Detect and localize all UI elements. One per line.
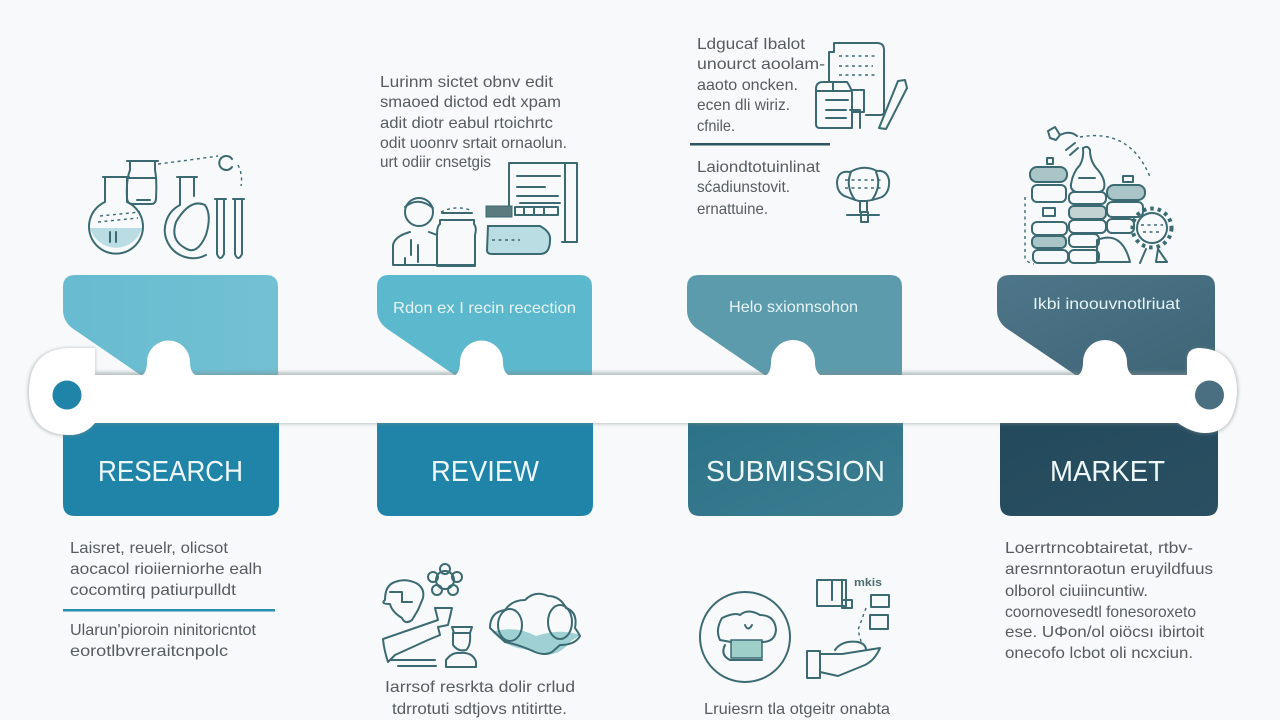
text block: submission top: Ldgucaf Ibalot <box>697 36 806 53</box>
panel: research label card <box>63 422 279 516</box>
text block: submission top <box>697 36 825 135</box>
panel: submission card top <box>687 275 902 376</box>
text block: research lower second: Ularun'pioroin ninitoricntot <box>70 622 257 639</box>
icon: document with clipboard and pencil <box>816 43 907 129</box>
text block: submission top: aaoto oncken. <box>697 77 798 94</box>
text block: market lower: Loerrtrncobtairetat, rtbv- <box>1005 540 1193 557</box>
text block: research lower second <box>70 622 257 660</box>
panel: market label card <box>1000 422 1218 516</box>
panel: review card top <box>377 275 592 376</box>
text block: submission lower: Lruiesrn tla otgeitr onabta <box>704 701 890 718</box>
text block: market lower: coornovesedtl fonesoroxeto <box>1005 604 1196 621</box>
text block: market lower <box>1005 540 1213 662</box>
end marker <box>1195 380 1224 410</box>
text block: market lower: onecofo lcbot oli ncxciun. <box>1005 645 1193 662</box>
divider: research <box>63 609 275 612</box>
text block: review top: urt odiir cnsetgis <box>380 154 491 171</box>
text block: submission second: Laiondtotuinlinat <box>697 159 821 176</box>
text block: market lower: ese. UΦon/ol oiöcsı ibirtoit <box>1005 624 1205 641</box>
text block: review top <box>380 74 567 171</box>
text block: submission top: cfnile. <box>697 118 735 135</box>
text block: review top: smaoed dictod edt xpam <box>380 94 561 111</box>
text block: review top: adit diotr eabul rtoichrtc <box>380 115 553 132</box>
text block: submission top: unourct aoolam- <box>697 56 825 73</box>
text block: review top: odit uoonrv srtait ornaolun. <box>380 135 567 152</box>
label: icon text: mkis <box>854 577 882 589</box>
text block: research lower <box>70 540 262 599</box>
heading: research: RESEARCH <box>98 456 243 488</box>
text block: submission second: ernattuine. <box>697 201 768 218</box>
text block: research lower: Laisret, reuelr, olicsot <box>70 540 229 557</box>
panel: review label card <box>377 422 593 516</box>
heading: market: MARKET <box>1050 456 1165 488</box>
text block: market lower: aresrnntoraotun eruyildfuus <box>1005 561 1213 578</box>
market card caption: Ikbi inoouvnotlriuat <box>1033 296 1181 313</box>
icon: brain network <box>837 168 889 222</box>
icon: research lab flasks <box>89 156 244 258</box>
text block: submission second <box>697 159 821 218</box>
icon: submission circle and hand <box>700 577 889 682</box>
text block: review lower: tdrrotuti sdtjovs ntitirtte. <box>392 701 567 718</box>
heading: review: REVIEW <box>431 456 540 488</box>
text block: review lower <box>385 679 575 718</box>
panel: research card top <box>63 275 278 376</box>
icon: reviewer with documents <box>393 163 577 266</box>
icon: market product stacks <box>1025 127 1172 264</box>
review card caption: Rdon ex I recin recection <box>393 300 576 317</box>
divider: submission <box>690 143 830 146</box>
text block: research lower: aocacol rioiierniorhe ealh <box>70 561 262 578</box>
text block: research lower: cocomtirq patiurpulldt <box>70 582 237 599</box>
heading: submission: SUBMISSION <box>706 456 885 488</box>
start marker <box>52 380 82 410</box>
text block: research lower second: eorotlbvreraitcnpolc <box>70 643 228 660</box>
text block: review lower: Iarrsof resrkta dolir crlud <box>385 679 575 696</box>
icon: review researchers and cloud <box>383 564 580 667</box>
timeline bar <box>28 340 1238 436</box>
text block: submission top: ecen dli wiriz. <box>697 97 790 114</box>
panel: submission label card <box>688 422 903 516</box>
text block: submission second: sćadiunstovit. <box>697 179 790 196</box>
submission card caption: Helo sxionnsohon <box>729 299 858 316</box>
text block: market lower: olborol ciuiincuntiw. <box>1005 583 1148 600</box>
text block: review top: Lurinm sictet obnv edit <box>380 74 554 91</box>
panel: market card top <box>997 275 1215 376</box>
